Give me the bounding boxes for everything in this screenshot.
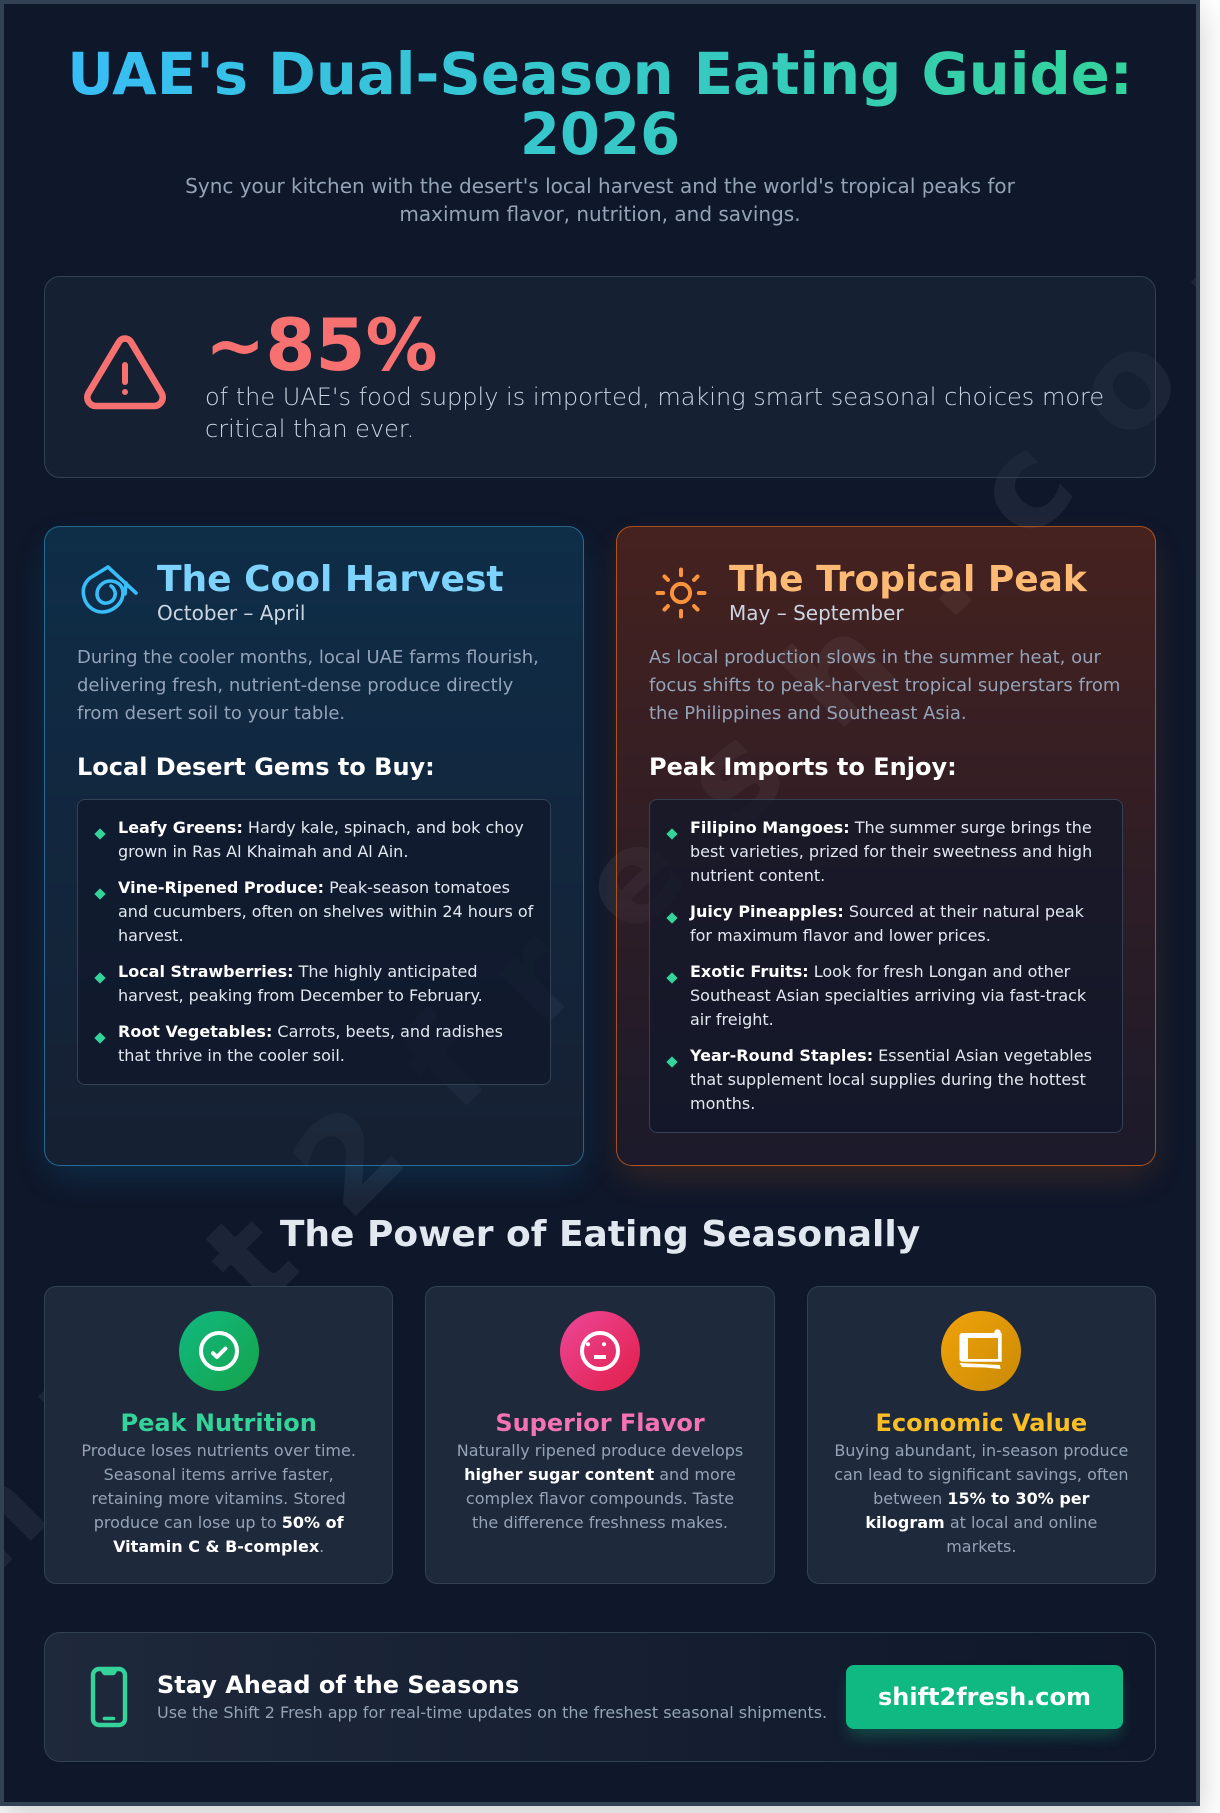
card heading: Superior Flavor <box>495 1409 705 1437</box>
season intro: During the cooler months, local UAE farms flourish, delivering fresh, nutrient-dense produce directly from desert soil to your table. <box>77 647 539 724</box>
list item: Local Strawberries: The highly anticipated harvest, peaking from December to February. <box>118 962 483 1005</box>
footer description: Use the Shift 2 Fresh app for real-time updates on the freshest seasonal shipments. <box>157 1703 827 1722</box>
season name: The Cool Harvest <box>157 559 504 600</box>
icon: check circle <box>179 1311 259 1391</box>
list item: Year-Round Staples: Essential Asian vegetables that supplement local supplies during the hottest months. <box>690 1046 1092 1113</box>
panel: peak nutrition <box>44 1286 393 1584</box>
season heading <box>729 559 1088 625</box>
subtitle: maximum flavor, nutrition, and savings. <box>399 202 801 226</box>
title <box>44 45 1156 165</box>
card text: Produce loses nutrients over time. Seasonal items arrive faster, retaining more vitamins. Stored produce can lose up to 50% of Vitamin C & B-complex. <box>81 1441 356 1556</box>
benefit cards <box>44 1286 1156 1584</box>
stat description: of the UAE's food supply is imported, making smart seasonal choices more critical than ever. <box>205 383 1104 443</box>
list: local produce <box>77 799 551 1085</box>
list item: Juicy Pineapples: Sourced at their natural peak for maximum flavor and lower prices. <box>690 902 1084 945</box>
list item: Vine-Ripened Produce: Peak-season tomatoes and cucumbers, often on shelves within 24 hours of harvest. <box>118 878 533 945</box>
footer heading: Stay Ahead of the Seasons <box>157 1671 519 1699</box>
icon: neutral face <box>560 1311 640 1391</box>
season header <box>81 559 504 625</box>
website button: shift2fresh.com <box>878 1683 1091 1711</box>
list item: Exotic Fruits: Look for fresh Longan and other Southeast Asian specialties arriving via fast-track air freight. <box>690 962 1086 1029</box>
list heading: Local Desert Gems to Buy: <box>77 753 435 781</box>
card text: Naturally ripened produce develops higher sugar content and more complex flavor compounds. Taste the difference freshness makes. <box>457 1441 743 1532</box>
footer message <box>90 1666 827 1728</box>
card text: Buying abundant, in-season produce can lead to significant savings, often between 15% to 30% per kilogram at local and online markets. <box>834 1441 1128 1556</box>
season heading <box>157 559 504 625</box>
section heading: The Power of Eating Seasonally <box>280 1214 920 1255</box>
footer call to action <box>44 1632 1156 1762</box>
list heading: Peak Imports to Enjoy: <box>649 753 957 781</box>
season panels <box>38 526 1164 1188</box>
title: UAE's Dual-Season Eating Guide: <box>67 41 1133 108</box>
panel: import statistic <box>44 276 1156 478</box>
list item: Leafy Greens: Hardy kale, spinach, and bok choy grown in Ras Al Khaimah and Al Ain. <box>118 818 524 861</box>
footer text <box>157 1671 827 1722</box>
list: imported produce <box>649 799 1123 1133</box>
icon: phone <box>90 1666 128 1728</box>
panel: the cool harvest <box>44 526 584 1166</box>
icon: cool harvest swirl <box>81 565 138 614</box>
icon: warning triangle <box>84 335 166 410</box>
card heading: Peak Nutrition <box>120 1409 317 1437</box>
subtitle <box>185 174 1015 226</box>
list item: Root Vegetables: Carrots, beets, and radishes that thrive in the cooler soil. <box>118 1022 503 1065</box>
statistic text <box>205 303 1104 443</box>
panel: superior flavor <box>425 1286 775 1584</box>
season intro: As local production slows in the summer heat, our focus shifts to peak-harvest tropical superstars from the Philippines and Southeast Asia. <box>649 647 1120 724</box>
website button <box>846 1665 1123 1729</box>
season dates: October – April <box>157 601 305 625</box>
season dates: May – September <box>729 601 904 625</box>
panel: the tropical peak <box>616 526 1156 1166</box>
icon: sun <box>656 568 706 618</box>
card heading: Economic Value <box>876 1409 1087 1437</box>
panel: economic value <box>807 1286 1156 1584</box>
icon: banknote <box>941 1311 1021 1391</box>
title: 2026 <box>520 101 680 168</box>
stat value: ~85% <box>205 303 438 387</box>
subtitle: Sync your kitchen with the desert's local harvest and the world's tropical peaks for <box>185 174 1015 198</box>
season name: The Tropical Peak <box>729 559 1087 600</box>
season header <box>656 559 1088 625</box>
list item: Filipino Mangoes: The summer surge brings the best varieties, prized for their sweetness and high nutrient content. <box>690 818 1092 885</box>
